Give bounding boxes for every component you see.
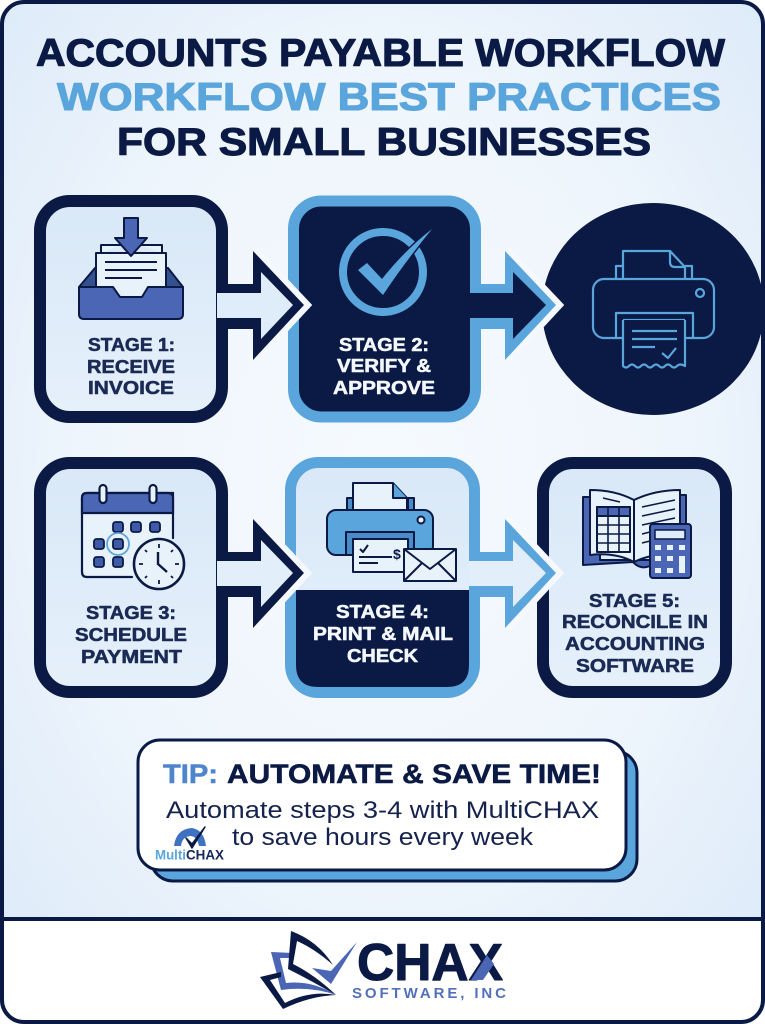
wordmark Software, Inc: SOFTWARE, INC (352, 985, 506, 1002)
title: FOR SMALL BUSINESSES (117, 121, 651, 164)
logo: MultiCHAX: Multi (155, 848, 186, 862)
label: stage 5: RECONCILE IN (562, 611, 708, 632)
tip heading: AUTOMATE & SAVE TIME! (227, 759, 601, 789)
title: ACCOUNTS PAYABLE WORKFLOW (36, 32, 725, 75)
label: stage 1: INVOICE (88, 377, 174, 398)
label: stage 3: STAGE 3: (86, 602, 176, 623)
label: stage 2: STAGE 2: (339, 334, 429, 355)
callout: automation tip (138, 740, 637, 881)
label: stage 1 (87, 334, 175, 398)
label: stage 5: ACCOUNTING (565, 633, 705, 654)
label: stage 1: RECEIVE (87, 356, 175, 377)
label band: stage 4: CHECK (347, 645, 419, 666)
icon: printer with check and envelope (327, 483, 456, 581)
label band: stage 4: STAGE 4: (336, 601, 429, 622)
label: stage 3 (75, 602, 187, 667)
arrow: stage 3 to stage 4 (217, 519, 304, 628)
icon: printer with receipt (593, 251, 714, 368)
title: WORKFLOW BEST PRACTICES (57, 76, 721, 119)
tip heading: TIP: (163, 759, 218, 789)
label: stage 2 (333, 334, 435, 398)
title (36, 32, 725, 164)
panel: printer circle (542, 203, 764, 415)
icon: inbox tray with invoice (79, 218, 183, 319)
panel: stage 1 receive invoice (40, 201, 222, 417)
logo mark: pages and check (260, 931, 357, 1009)
logo: CHAX Software (260, 931, 506, 1009)
label band: stage 4 (296, 590, 469, 687)
label: stage 5 (562, 590, 708, 676)
arrow: stage 2 to printer (470, 251, 556, 360)
tip body text (166, 797, 599, 851)
label: stage 5: SOFTWARE (576, 655, 694, 676)
wordmark CHAX: CHAX (357, 934, 503, 992)
logo: MultiCHAX (155, 827, 224, 862)
label: stage 5: STAGE 5: (589, 590, 680, 611)
icon: calendar with clock (82, 485, 184, 589)
panel: stage 2 verify and approve (294, 201, 476, 417)
panel: stage 3 schedule payment (40, 463, 222, 692)
label: stage 1: STAGE 1: (88, 334, 175, 355)
arrow: stage 1 to stage 2 (217, 251, 304, 360)
logo: MultiCHAX: CHAX (186, 848, 224, 862)
icon: printer with check and envelope: $ (393, 546, 401, 562)
label: stage 3: PAYMENT (81, 646, 183, 667)
label: stage 2: APPROVE (333, 377, 435, 398)
panel: stage 4 print and mail check (290, 462, 474, 692)
label: stage 2: VERIFY & (337, 355, 431, 376)
panel: stage 5 reconcile in accounting software (543, 463, 726, 692)
arrow: stage 4 to stage 5 (469, 519, 556, 628)
icon: ledger book and calculator (583, 490, 691, 578)
tip body text: to save hours every week (232, 824, 534, 851)
label band: stage 4: PRINT & MAIL (313, 623, 453, 644)
icon: check mark in circle (343, 229, 432, 312)
label: stage 3: SCHEDULE (75, 624, 187, 645)
tip body text: Automate steps 3-4 with MultiCHAX (166, 797, 599, 824)
footer band (2, 917, 763, 1022)
